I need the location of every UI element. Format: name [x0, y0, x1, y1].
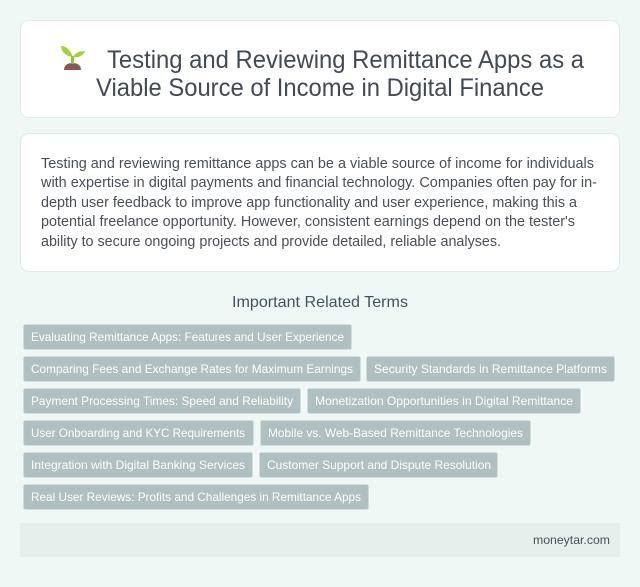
footer: moneytar.com [533, 533, 610, 547]
text block: description: ability to secure ongoing projects and provide detailed, reliable analyses. [41, 234, 501, 250]
heading: Important Related Terms: Important Related Terms [232, 294, 408, 311]
heading: Testing and Reviewing Remittance Apps as a [107, 46, 584, 74]
icon: seedling [61, 46, 85, 70]
tag [24, 356, 360, 382]
tag: Monetization Opportunities in Digital Remittance [315, 394, 573, 408]
tag [260, 420, 530, 446]
related terms tags [24, 324, 614, 510]
tag [24, 452, 252, 478]
tag: User Onboarding and KYC Requirements [31, 426, 245, 440]
tag [366, 356, 614, 382]
text block: description: depth user feedback to improve app functionality and user experience, making this a [41, 195, 578, 211]
tag [24, 484, 368, 510]
text block: description: Testing and reviewing remittance apps can be a viable source of income for individuals [41, 156, 594, 172]
tag [24, 420, 254, 446]
tag: Comparing Fees and Exchange Rates for Maximum Earnings [31, 362, 353, 376]
tag: Evaluating Remittance Apps: Features and User Experience [31, 330, 344, 344]
heading [96, 46, 584, 102]
panel: description [20, 134, 620, 272]
tag: Payment Processing Times: Speed and Reliability [31, 394, 293, 408]
tag [308, 388, 580, 414]
tag: Real User Reviews: Profits and Challenges in Remittance Apps [31, 490, 361, 504]
tag: Mobile vs. Web-Based Remittance Technologies [268, 426, 523, 440]
text block: description [40, 156, 597, 250]
footer [20, 523, 620, 557]
tag [24, 324, 352, 350]
tag [260, 452, 498, 478]
tag [24, 388, 300, 414]
panel: title [20, 20, 620, 118]
tag: Integration with Digital Banking Services [31, 458, 245, 472]
tag: Customer Support and Dispute Resolution [267, 458, 491, 472]
heading: Viable Source of Income in Digital Finance [96, 74, 544, 102]
tag: Security Standards in Remittance Platforms [374, 362, 607, 376]
text block: description: with expertise in digital payments and financial technology. Companies often pay for in- [40, 175, 597, 191]
text block: description: potential freelance opportunity. However, consistent earnings depend on the tester's [41, 214, 575, 230]
